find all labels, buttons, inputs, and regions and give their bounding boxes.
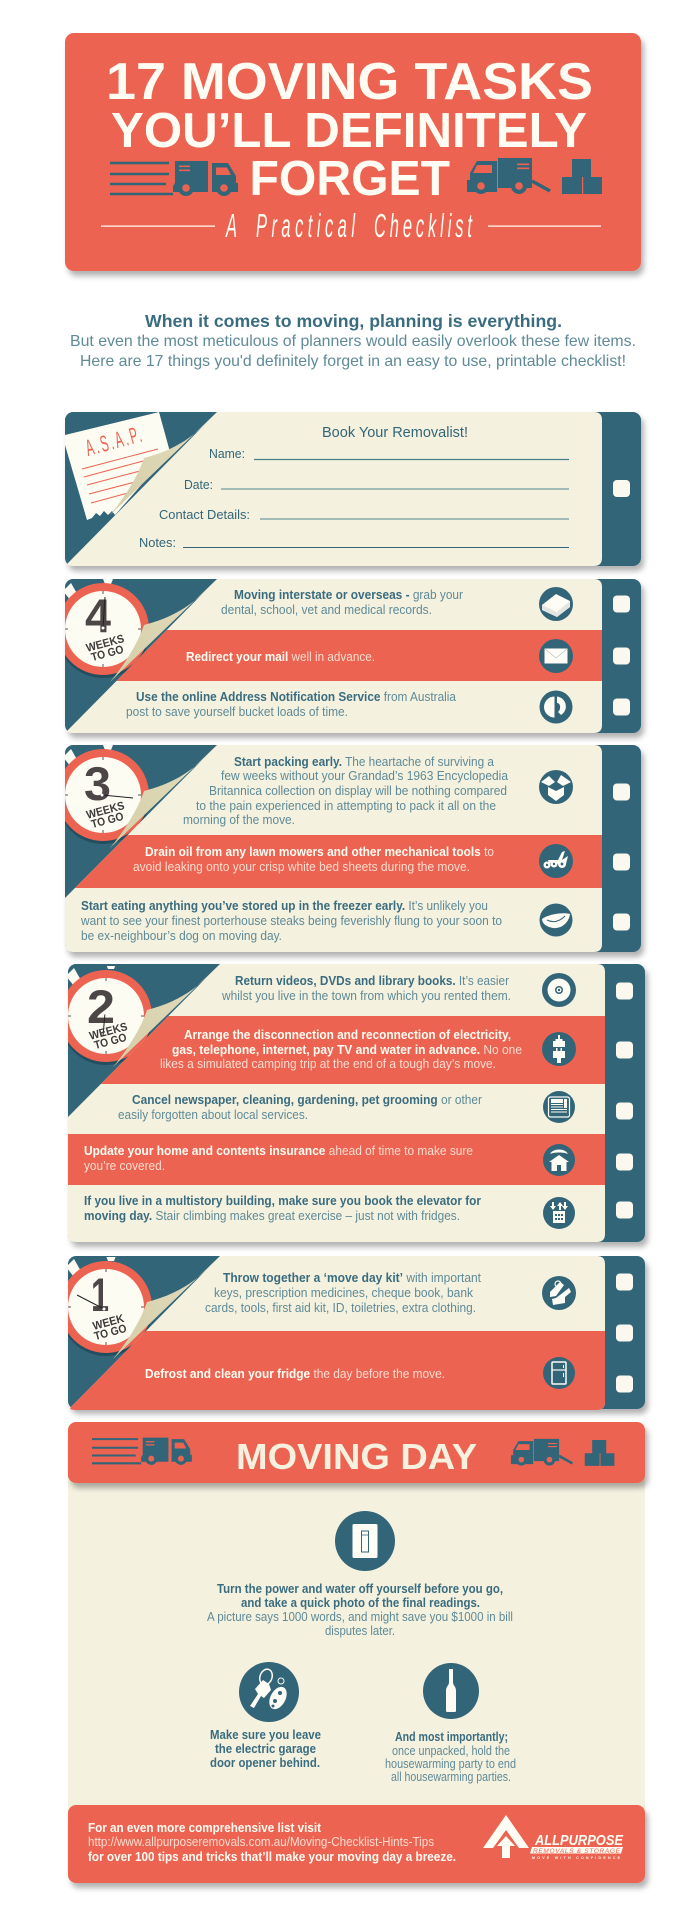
text: power and water: and take a quick photo of the final readings. — [241, 1596, 480, 1610]
logo — [483, 1815, 624, 1860]
form: Notes: — [139, 535, 176, 550]
logo: REMOVALS & STORAGE — [533, 1848, 621, 1855]
checkboxes — [613, 596, 630, 716]
task: address notification — [126, 690, 456, 719]
task: elevator: moving day. Stair climbing makes great exercise – just not with fridges. — [84, 1209, 460, 1223]
panel: moving day body — [68, 1470, 645, 1815]
panel: 2 weeks to go — [60, 964, 645, 1242]
icon: disc — [542, 973, 576, 1007]
task: freezer — [80, 899, 502, 943]
intro text: But even the most meticulous of planners would easily overlook these few items. — [70, 333, 636, 350]
task: videos — [221, 974, 511, 1003]
footer text — [88, 1821, 456, 1864]
icon: clock 1 week: TO GO — [93, 1323, 128, 1343]
icon: clock 3 weeks: TO GO — [90, 811, 125, 831]
task: address notification: Use the online Address Notification Service from Australia — [136, 690, 456, 704]
text: garage opener — [210, 1728, 321, 1770]
icon: steak — [540, 904, 572, 936]
text: housewarming: all housewarming parties. — [391, 1770, 511, 1784]
task: utilities — [160, 1028, 522, 1071]
form: Date: — [184, 477, 213, 492]
icon: house and umbrella — [543, 1144, 575, 1176]
icon: australia post — [540, 690, 572, 724]
checkbox — [613, 480, 630, 497]
task: packing — [183, 755, 508, 827]
text: housewarming: housewarming party to end — [385, 1757, 516, 1771]
icon: boxes — [562, 159, 602, 194]
panel: 1 week to go — [60, 1256, 645, 1410]
form: Name: — [209, 446, 245, 461]
panel: book your removalist — [65, 412, 641, 566]
icon: clock 4 weeks: WEEKS — [85, 633, 126, 655]
task: videos: whilst you live in the town from which you rented them. — [221, 989, 511, 1003]
icon: clock 2 weeks: TO GO — [93, 1032, 128, 1052]
intro text: Here are 17 things you'd definitely forget in an easy to use, printable checklist! — [80, 353, 626, 370]
icon: clock 2 weeks — [68, 966, 152, 1065]
task: insurance — [84, 1144, 473, 1173]
logo: ALLPURPOSE — [534, 1832, 624, 1849]
icon: speeding truck — [110, 161, 238, 196]
checkboxes — [613, 784, 630, 930]
task: packing: few weeks without your Grandad’s 1963 Encyclopedia — [221, 769, 508, 783]
icon: clock 2 weeks: WEEKS — [88, 1021, 129, 1043]
icon: clock 1 week: WEEK — [92, 1313, 126, 1333]
title banner — [65, 33, 641, 271]
text: housewarming: once unpacked, hold the — [392, 1744, 510, 1758]
icon: clock 3 weeks: WEEKS — [85, 800, 126, 822]
icon: light switch — [335, 1511, 395, 1571]
subtitle: Practical — [256, 207, 356, 245]
icon: clock 4 weeks — [57, 579, 149, 678]
task: insurance: you’re covered. — [84, 1159, 165, 1173]
icon: clock 4 weeks: TO GO — [90, 644, 125, 664]
subtitle: A — [225, 207, 237, 245]
intro text: When it comes to moving, planning is everything. — [145, 311, 562, 331]
icon: clock 1 week: 1 — [91, 1268, 109, 1321]
text: garage opener: the electric garage — [215, 1742, 316, 1756]
task: utilities: Arrange the disconnection and reconnection of electricity, — [184, 1028, 511, 1042]
title line 3: FORGET — [250, 151, 450, 206]
task: move day kit: keys, prescription medicines, cheque book, bank — [214, 1286, 474, 1300]
panel: 3 weeks to go — [57, 745, 641, 952]
footer text: http://www.allpurposeremovals.com.au/Moving-Checklist-Hints-Tips — [88, 1835, 434, 1849]
task: elevator — [84, 1194, 481, 1223]
task: drain oil — [133, 845, 494, 874]
text: housewarming — [385, 1730, 516, 1784]
icon: plugs — [542, 1032, 576, 1066]
task: freezer: Start eating anything you’ve stored up in the freezer early. It’s unlikely you — [81, 899, 488, 913]
task: address notification: post to save yourself bucket loads of time. — [126, 705, 348, 719]
icon: keys — [239, 1662, 299, 1722]
icon: speeding truck — [92, 1438, 192, 1465]
text: power and water — [207, 1582, 513, 1638]
subtitle: Checklist — [374, 207, 473, 245]
intro text — [70, 311, 636, 370]
task: utilities: likes a simulated camping trip at the end of a tough day’s move. — [160, 1057, 496, 1071]
task: local services: Cancel newspaper, cleaning, gardening, pet grooming or other — [132, 1093, 482, 1107]
logo: MOVE WITH CONFIDENCE — [532, 1856, 621, 1860]
icon: truck with ramp — [511, 1439, 572, 1466]
form — [139, 424, 569, 550]
icon: elevator — [543, 1197, 575, 1229]
icon: lawn mower — [539, 844, 573, 878]
task: drain oil: avoid leaking onto your crisp white bed sheets during the move. — [133, 860, 470, 874]
task: packing: to the pain experienced in attempting to pack it all on the — [196, 799, 496, 813]
task: freezer: want to see your finest porterhouse steaks being feverishly flung to your soon to — [80, 914, 502, 928]
text: power and water: disputes later. — [325, 1624, 395, 1638]
task: mail: Redirect your mail well in advance. — [186, 650, 375, 664]
task: freezer: be ex-neighbour’s dog on moving day. — [81, 929, 282, 943]
task: videos: Return videos, DVDs and library books. It’s easier — [235, 974, 509, 988]
task: move day kit: Throw together a ‘move day kit’ with important — [223, 1271, 482, 1285]
task: move day kit: cards, tools, first aid kit, ID, toiletries, extra clothing. — [205, 1301, 476, 1315]
text: power and water: A picture says 1000 words, and might save you $1000 in bill — [207, 1610, 513, 1624]
task: records: dental, school, vet and medical records. — [221, 603, 432, 617]
text: garage opener: Make sure you leave — [210, 1728, 321, 1742]
footer — [68, 1805, 645, 1883]
text: garage opener: door opener behind. — [210, 1756, 320, 1770]
footer text: for over 100 tips and tricks that’ll make your moving day a breeze. — [88, 1850, 456, 1864]
icon: clock 2 weeks: 2 — [87, 980, 115, 1033]
panel: 4 weeks to go — [57, 579, 641, 733]
moving day header — [68, 1422, 645, 1483]
task: packing: Start packing early. The heartache of surviving a — [234, 755, 494, 769]
icon: kit — [542, 1276, 576, 1310]
heading: MOVING DAY — [236, 1436, 477, 1477]
text: housewarming: And most importantly; — [395, 1730, 508, 1744]
footer text: For an even more comprehensive list visit — [88, 1821, 322, 1835]
task: packing: Britannica collection on display will be nothing compared — [209, 784, 507, 798]
icon: open box — [539, 770, 573, 804]
icon: truck with ramp — [467, 158, 550, 194]
task: move day kit — [205, 1271, 482, 1315]
text: power and water: Turn the power and water off yourself before you go, — [217, 1582, 503, 1596]
checkboxes — [616, 982, 633, 1218]
icon: fridge — [543, 1357, 575, 1389]
icon: newspaper — [543, 1091, 575, 1123]
task: records — [221, 588, 463, 617]
icon: clock 4 weeks: 4 — [85, 589, 111, 642]
task: records: Moving interstate or overseas - grab your — [234, 588, 463, 602]
icon: envelope — [539, 639, 573, 673]
icon: ASAP note — [65, 412, 170, 520]
form: Contact Details: — [159, 507, 250, 522]
task: insurance: Update your home and contents insurance ahead of time to make sure — [84, 1144, 473, 1158]
form: Book Your Removalist! — [322, 424, 468, 441]
icon: clock 3 weeks: 3 — [84, 757, 111, 810]
task: packing: morning of the move. — [183, 813, 295, 827]
icon: wine bottle — [423, 1663, 479, 1719]
icon: clock 1 week — [68, 1257, 152, 1356]
task: fridge: Defrost and clean your fridge the day before the move. — [145, 1367, 445, 1381]
icon: ASAP note: A.S.A.P. — [83, 422, 144, 461]
subtitle — [101, 207, 601, 245]
task: drain oil: Drain oil from any lawn mowers and other mechanical tools to — [145, 845, 494, 859]
task: local services: easily forgotten about local services. — [118, 1108, 308, 1122]
icon: boxes — [585, 1440, 614, 1466]
icon: clock 3 weeks — [57, 745, 149, 844]
icon: documents — [539, 587, 573, 621]
task: local services — [118, 1093, 482, 1122]
checkboxes — [616, 1274, 633, 1392]
task: utilities: gas, telephone, internet, pay TV and water in advance. No one — [172, 1043, 522, 1057]
task: elevator: If you live in a multistory building, make sure you book the elevator for — [84, 1194, 481, 1208]
title line 2: YOU’LL DEFINITELY — [111, 103, 587, 158]
title line 1: 17 MOVING TASKS — [106, 53, 593, 111]
